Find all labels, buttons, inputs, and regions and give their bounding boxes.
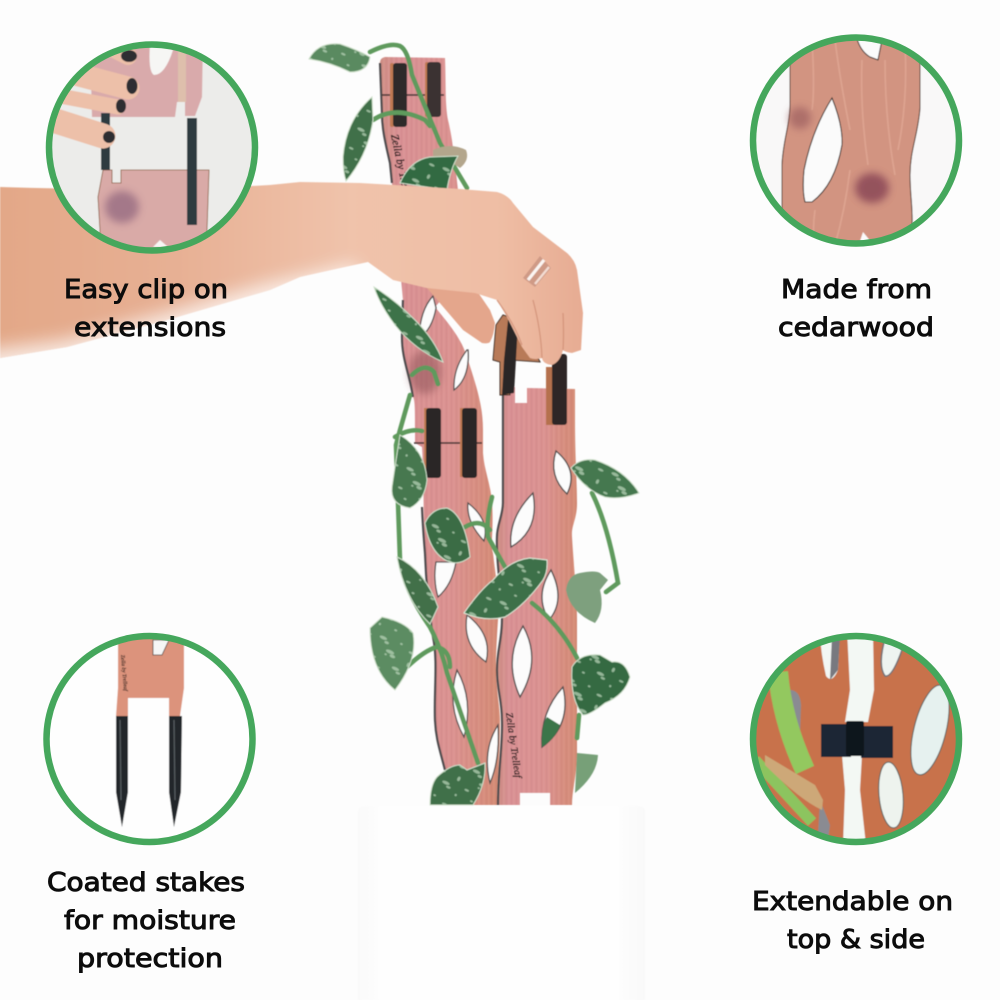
black tips (116, 716, 128, 827)
arm, hand and fingers (0, 182, 583, 365)
clip on right of extension (546, 367, 554, 425)
green ring (753, 636, 959, 842)
leaf: top (309, 44, 370, 72)
dark clip seam and clips (382, 94, 444, 96)
leaf: right pale (566, 572, 608, 623)
burlap moss tie (433, 146, 467, 168)
leaf: large centre (464, 558, 547, 619)
black clip (821, 721, 893, 758)
caption: extensions (74, 313, 226, 343)
green ring (46, 636, 252, 842)
dark knot area (409, 350, 441, 394)
green ring (49, 44, 255, 250)
leaf: under hand (374, 287, 443, 362)
nails (103, 50, 138, 143)
panel: coated stakes (43, 630, 256, 974)
caption (47, 868, 245, 974)
caption (64, 275, 228, 343)
leaves (309, 44, 639, 805)
engraved brand text: Zella by Trelleaf (388, 133, 415, 208)
caption: cedarwood (778, 313, 934, 343)
fingers (40, 42, 128, 136)
dark cut edge (380, 63, 445, 770)
soft fade on underside of forearm (0, 280, 360, 368)
leaf: right lower (572, 655, 630, 715)
caption: for moisture (64, 906, 236, 936)
stake holes (419, 296, 498, 783)
panel: made from cedarwood (750, 30, 962, 343)
leaf: narrow (397, 557, 438, 624)
index finger (405, 282, 495, 343)
leaf: bottom (430, 763, 485, 805)
front stake holes (511, 451, 571, 805)
central slit (842, 630, 874, 845)
leaf: left at clip (392, 435, 427, 508)
leaf: in hole (542, 717, 560, 747)
engraved brand text: Zella by Trelleaf (503, 712, 523, 780)
back cedar stake (380, 57, 500, 805)
leaf: right upper (571, 460, 639, 498)
dark cut edge (497, 390, 503, 805)
dried sheath (765, 755, 823, 810)
circle photo: side clip (756, 640, 956, 838)
panel: extendable on top and side (750, 630, 962, 955)
upper wood piece (90, 40, 203, 117)
caption (778, 275, 934, 343)
white pot (358, 806, 645, 1000)
wood grain lines (812, 40, 906, 250)
caption: Extendable on (752, 887, 953, 917)
panel: easy clip on extensions (40, 40, 258, 343)
circle photo: coated stake tips (116, 639, 184, 827)
black clips (101, 113, 110, 170)
leaf: far left (370, 617, 414, 690)
caption: protection (77, 944, 223, 974)
leaf: round on back stake (425, 508, 470, 563)
ring (523, 256, 551, 287)
main photo: plant stakes, vine and hand (0, 42, 640, 806)
finger creases (497, 300, 564, 358)
upper extension clip (493, 315, 567, 425)
circle photo: clip joint (52, 48, 252, 248)
caption: Easy clip on (64, 275, 228, 305)
arm and hand (0, 182, 583, 368)
green plant stems (778, 672, 805, 770)
lower wood piece (97, 169, 210, 248)
leaf: lower pale (575, 753, 598, 793)
leaf: behind hand (400, 156, 458, 190)
caption: Made from (781, 275, 932, 305)
vine stems (370, 45, 618, 763)
leaf: upper left (343, 97, 373, 181)
caption (752, 887, 953, 955)
oval hole (803, 98, 842, 202)
oval holes (790, 640, 950, 835)
green ring (753, 38, 959, 244)
caption: top & side (787, 925, 925, 955)
brand text: Zella by Trelleaf (119, 655, 129, 693)
front cedar stake (497, 367, 577, 805)
knots (789, 107, 811, 129)
circle photo: cedar wood close-up (780, 40, 922, 240)
caption: Coated stakes (47, 868, 245, 898)
